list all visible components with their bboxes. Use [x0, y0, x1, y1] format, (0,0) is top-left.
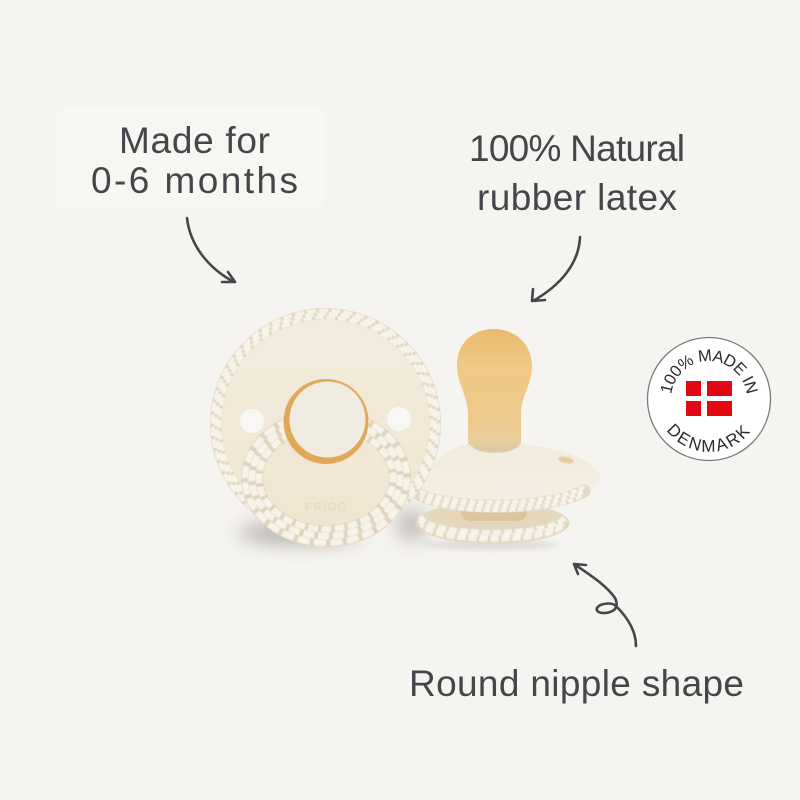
rubber collar: [284, 379, 368, 464]
stem: [461, 503, 527, 521]
badge text top: 100% MADE IN: [661, 349, 758, 394]
strap holes: [240, 407, 411, 433]
button: [290, 382, 366, 458]
brand emboss: FRIGG: [305, 500, 347, 514]
pacifier: front view: [210, 308, 441, 543]
callout: natural rubber latex: rubber latex: [477, 177, 678, 218]
side shield: [415, 444, 601, 510]
shield with rope rim: [210, 308, 441, 539]
callout: made for 0-6 months: 0-6 months: [91, 160, 298, 201]
rope ring handle: [245, 413, 407, 543]
pacifier: side view: [415, 329, 601, 544]
danish flag: [686, 381, 732, 416]
callout: made for 0-6 months: Made for: [119, 120, 270, 161]
callout: natural rubber latex: 100% Natural: [469, 128, 685, 169]
arrow: to nipple: [532, 237, 580, 301]
badge: 100% made in Denmark: [646, 336, 772, 462]
callout: natural rubber latex: [469, 128, 685, 218]
arrow: loop to shield: [574, 564, 636, 646]
nipple: [457, 329, 532, 456]
badge text bottom: DENMARK: [667, 423, 750, 452]
shadow under pacifiers: [238, 509, 560, 549]
rope ring: [416, 502, 570, 544]
callout: made for 0-6 months: [58, 108, 324, 207]
arrow: to left pacifier: [187, 218, 235, 282]
callout: round nipple shape: Round nipple shape: [409, 663, 744, 704]
